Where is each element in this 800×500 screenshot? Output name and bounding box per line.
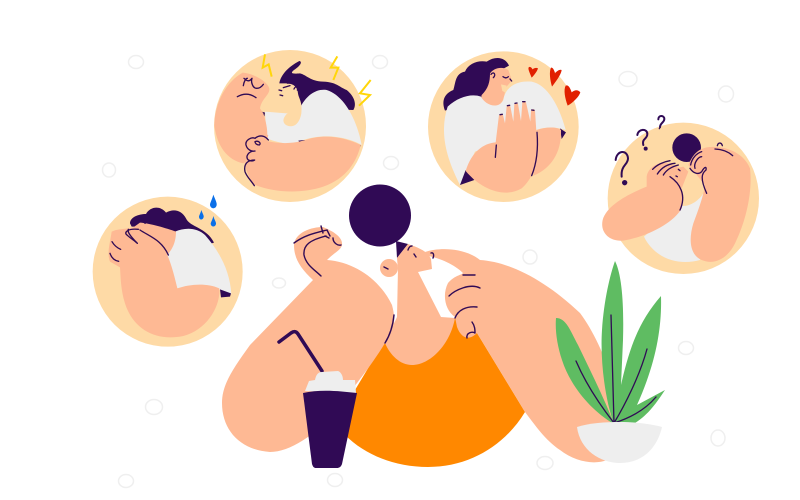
badge circle [428, 51, 579, 202]
hair bun [672, 133, 701, 162]
orange dress [345, 318, 525, 467]
sleeve shadow [220, 289, 231, 297]
body line work [294, 226, 480, 343]
shirt [265, 90, 362, 145]
face [397, 244, 432, 272]
panel: woman in love [428, 51, 580, 202]
plant [556, 261, 665, 463]
neck and chest [385, 262, 455, 365]
shirt [167, 229, 231, 294]
lips [501, 84, 507, 92]
panel: central woman [222, 184, 625, 467]
whipped cream [305, 371, 356, 393]
sleeve shadows [262, 112, 361, 150]
forearm [244, 134, 361, 191]
hair [279, 61, 355, 110]
raised fist and upper arm [214, 73, 269, 163]
drink cup [279, 332, 357, 468]
panel: angry woman [214, 50, 371, 202]
hand lines [110, 219, 168, 261]
cup body [303, 391, 357, 468]
hair wedge [396, 241, 408, 258]
arm and face [109, 223, 219, 337]
face detail [279, 86, 298, 96]
sweat drops [199, 195, 217, 226]
hair [443, 58, 509, 111]
pot [577, 422, 662, 463]
fist lines [237, 78, 268, 186]
left arm and hand [222, 227, 394, 452]
right arm [688, 147, 751, 262]
lines [653, 143, 733, 210]
hearts [528, 67, 580, 106]
badge circle [214, 50, 366, 202]
neck and face [667, 165, 703, 206]
leaves [556, 318, 614, 424]
question marks [616, 116, 664, 177]
background bubbles [102, 56, 734, 488]
panel: confused woman [602, 116, 759, 274]
sleeve shadows [460, 128, 566, 185]
badge circle [608, 123, 759, 274]
panel: sweating woman [93, 195, 243, 347]
forearm behind [533, 127, 561, 176]
hair [130, 208, 214, 250]
leaf veins [576, 315, 656, 423]
straw [279, 332, 322, 371]
ear [380, 259, 398, 277]
hair bun [349, 184, 411, 246]
shirt [444, 81, 566, 185]
arm and hand [466, 101, 537, 193]
face and neck [481, 68, 511, 107]
left arm [602, 163, 683, 241]
shirt [644, 193, 703, 262]
hand lines and nails [491, 73, 537, 176]
face and neck [278, 84, 302, 126]
badge circle [93, 197, 243, 347]
lightning bolts [263, 54, 371, 106]
right arm and hand [425, 249, 625, 462]
